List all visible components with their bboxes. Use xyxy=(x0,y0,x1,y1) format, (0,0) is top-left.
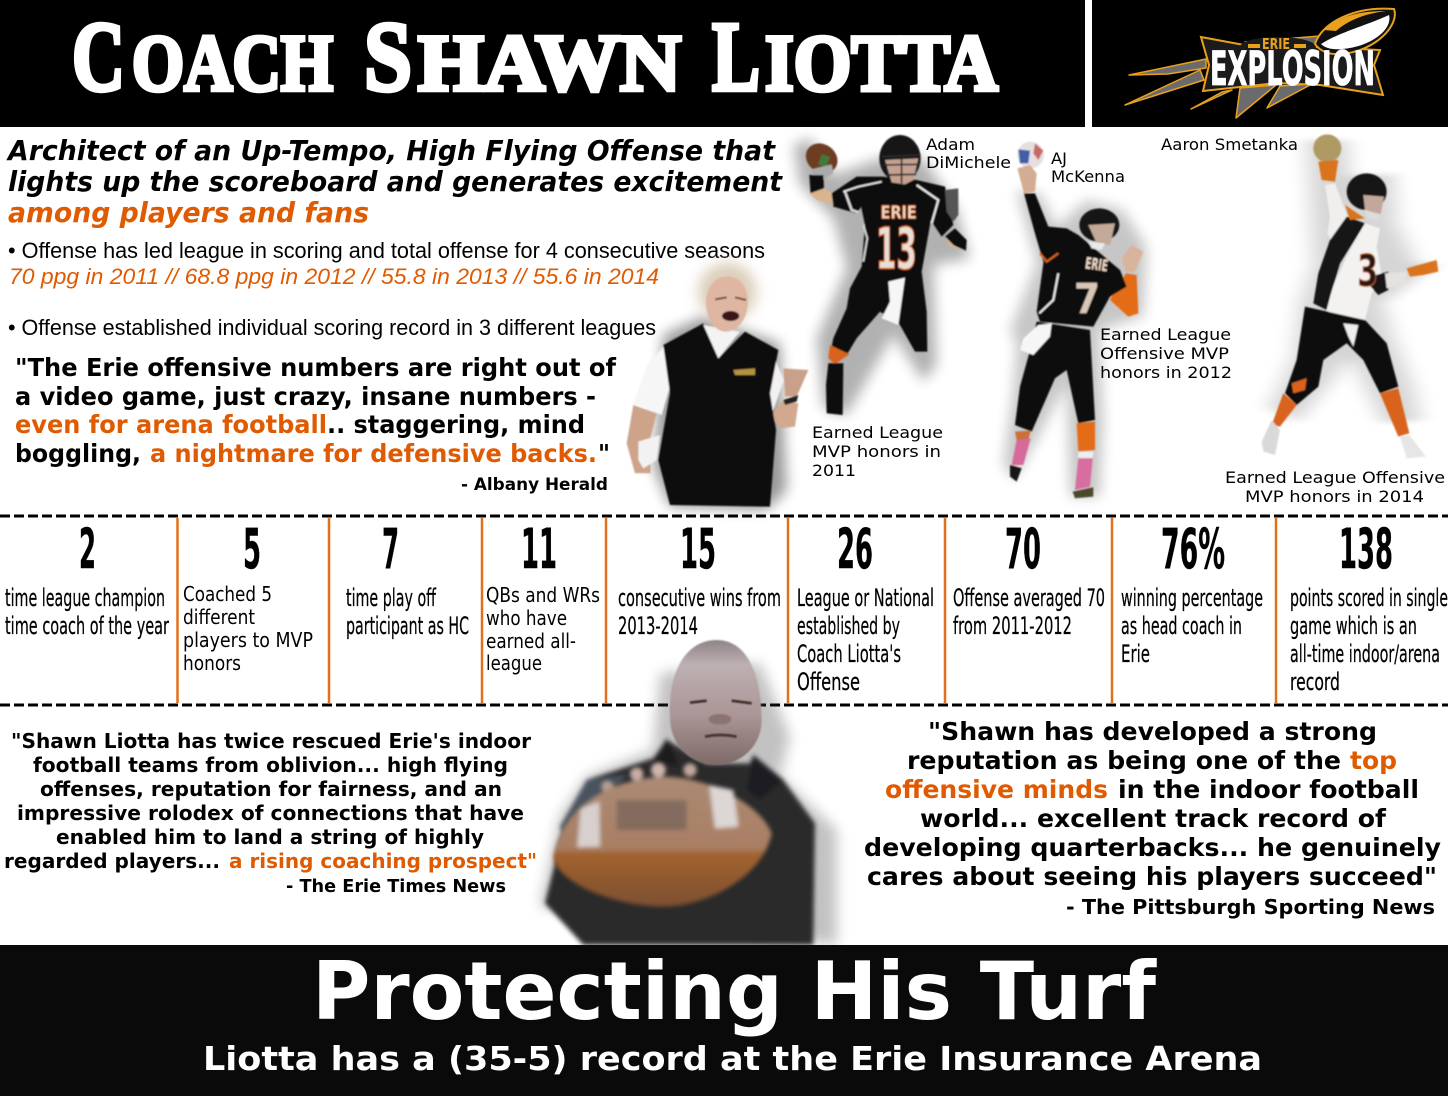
quote: Erie Times News: impressive rolodex of connections that have xyxy=(17,801,524,825)
quote: Pittsburgh Sporting News: reputation as being one of the xyxy=(907,746,1341,775)
title text: S xyxy=(364,1,412,112)
logo panel: Erie Explosion xyxy=(1092,0,1448,127)
quote: Erie Times News: "Shawn Liotta has twice rescued Erie's indoor xyxy=(11,729,531,753)
label: Aaron Smetanka: Aaron Smetanka xyxy=(1161,135,1298,154)
stat: 11: 11 xyxy=(521,517,557,581)
title text xyxy=(72,1,998,112)
stat: 76%: Erie xyxy=(1121,640,1150,668)
label: AJ McKenna: AJ xyxy=(1051,149,1067,168)
coach figure xyxy=(627,277,808,507)
stat: 138: record xyxy=(1290,668,1340,696)
quote: Erie Times News: - The Erie Times News xyxy=(286,876,506,897)
stat: 7: participant as HC xyxy=(346,612,469,640)
face features xyxy=(690,701,752,737)
stat: 2: 2 xyxy=(79,517,96,581)
quote: Albany Herald xyxy=(15,353,617,495)
stat: 26 xyxy=(797,517,934,696)
stat: 76% xyxy=(1121,517,1263,668)
title banner xyxy=(0,0,1085,127)
coach hair xyxy=(698,262,757,321)
quote: Albany Herald: even for arena football xyxy=(15,410,327,439)
stat: 7 xyxy=(346,517,469,640)
photo: Adam DiMichele 13 xyxy=(793,135,970,415)
heading: architect of an offense: among players and fans xyxy=(8,197,369,229)
quote: Pittsburgh Sporting News: world... excellent track record of xyxy=(920,804,1387,833)
stat: 11: QBs and WRs xyxy=(486,583,600,607)
stat: 138 xyxy=(1290,517,1448,696)
title text: HAWN xyxy=(418,20,681,108)
label: Adam DiMichele xyxy=(926,135,1011,172)
label: AJ McKenna xyxy=(1051,149,1125,186)
stat: 15: 15 xyxy=(680,517,716,581)
quote: Pittsburgh Sporting News xyxy=(864,717,1441,919)
jacket xyxy=(545,738,815,945)
logo wordmark xyxy=(1210,35,1375,97)
stat: 15 xyxy=(618,517,781,640)
stat: 5 xyxy=(183,517,313,675)
quote: Erie Times News: offenses, reputation for fairness, and an xyxy=(40,777,502,801)
stat: 70: from 2011-2012 xyxy=(953,612,1072,640)
stat: 26: 26 xyxy=(837,517,873,581)
footer heading: Protecting His Turf xyxy=(312,945,1157,1038)
jersey number: 3 xyxy=(1357,247,1378,297)
jersey lettering: ERIE xyxy=(1084,253,1109,275)
caption: MVP 2014 xyxy=(1225,468,1445,506)
stat: 7: time play off xyxy=(346,584,436,612)
title text: OACH xyxy=(132,20,333,108)
caption: MVP 2014: MVP honors in 2014 xyxy=(1245,487,1424,506)
coach shadow xyxy=(653,317,787,510)
quote: Pittsburgh Sporting News: cares about seeing his players succeed" xyxy=(867,862,1437,891)
heading: architect of an offense: Architect of an Up-Tempo, High Flying Offense that xyxy=(6,135,776,167)
stat: 76%: winning percentage xyxy=(1121,584,1263,612)
player figure xyxy=(800,135,967,415)
caption: MVP 2011: MVP honors in xyxy=(812,442,941,461)
bullet: scoring seasons xyxy=(8,238,765,289)
photo: coach on sideline xyxy=(627,262,808,510)
quote: Albany Herald: a nightmare for defensive backs. xyxy=(150,439,597,468)
caption: MVP 2012: Earned League xyxy=(1100,325,1231,344)
stat: 70: 70 xyxy=(1005,517,1041,581)
quote: Albany Herald: - Albany Herald xyxy=(461,475,608,495)
football xyxy=(553,763,772,907)
quote: Albany Herald: a video game, just crazy, insane numbers - xyxy=(15,382,596,411)
jersey lettering: 7 xyxy=(1074,274,1100,323)
caption: MVP 2012 xyxy=(1100,325,1232,382)
stat: 70 xyxy=(953,517,1105,640)
caption: MVP 2012: honors in 2012 xyxy=(1100,363,1232,382)
quote: Albany Herald: " xyxy=(598,439,610,468)
stat: 5: players to MVP xyxy=(183,628,313,652)
quote: Albany Herald: boggling, xyxy=(15,439,141,468)
player figure xyxy=(1010,142,1143,498)
stat: 5: 5 xyxy=(243,517,261,581)
title text: IOTTA xyxy=(765,20,998,108)
stat: 2: time league champion xyxy=(5,584,165,612)
quote: Pittsburgh Sporting News: developing quarterbacks... he genuinely xyxy=(864,833,1441,862)
stat: 5: Coached 5 xyxy=(183,582,272,606)
caption: MVP 2011: 2011 xyxy=(812,461,856,480)
quote: Erie Times News xyxy=(4,729,537,897)
stat: 5: honors xyxy=(183,651,241,675)
caption: MVP 2011 xyxy=(812,423,943,480)
stat: 70: Offense averaged 70 xyxy=(953,584,1105,612)
bullet: scoring record: • Offense established individual scoring record in 3 different leagues xyxy=(8,315,656,340)
photo: coach holding football xyxy=(540,640,837,945)
stat: 26: Coach Liotta's xyxy=(797,640,901,668)
quote: Erie Times News: a rising coaching prospect xyxy=(229,849,527,873)
stat: 15: consecutive wins from xyxy=(618,584,781,612)
logo football xyxy=(1315,9,1395,54)
photo: AJ McKenna 7 xyxy=(1003,142,1147,498)
caption: MVP 2011: Earned League xyxy=(812,423,943,442)
photo: Aaron Smetanka 3 xyxy=(1262,134,1438,458)
footer subheading: Liotta has a (35-5) record at the Erie Insurance Arena xyxy=(203,1039,1262,1078)
title text: L xyxy=(712,1,760,112)
jersey lettering xyxy=(876,202,917,282)
quote: Pittsburgh Sporting News: top xyxy=(1350,746,1397,775)
heading: architect of an offense xyxy=(6,135,783,229)
quote: Albany Herald: "The Erie offensive numbers are right out of xyxy=(15,353,617,382)
quote: Erie Times News: regarded players... xyxy=(4,849,220,873)
label: Adam DiMichele: Adam xyxy=(926,135,975,154)
stat: 11: league xyxy=(486,651,542,675)
player figure xyxy=(1262,134,1438,458)
heading: architect of an offense: lights up the scoreboard and generates excitement xyxy=(8,166,783,198)
stat: 11 xyxy=(486,517,600,675)
stat: 5: different xyxy=(183,605,255,629)
stat: 26: League or National xyxy=(797,584,934,612)
caption: MVP 2012: Offensive MVP xyxy=(1100,344,1229,363)
jersey lettering xyxy=(1074,253,1109,323)
quote: Albany Herald: .. staggering, mind xyxy=(327,410,585,439)
quote: Pittsburgh Sporting News: "Shawn has developed a strong xyxy=(928,717,1377,746)
bullet: scoring seasons: • Offense has led league in scoring and total offense for 4 consecutive seasons xyxy=(8,238,765,263)
label: Adam DiMichele: DiMichele xyxy=(926,153,1011,172)
stat: 11: earned all- xyxy=(486,629,576,653)
stat: 11: who have xyxy=(486,606,567,630)
player shadow xyxy=(793,138,970,415)
stat: 76%: as head coach in xyxy=(1121,612,1242,640)
quote: Erie Times News: " xyxy=(527,849,537,873)
quote: Erie Times News: enabled him to land a string of highly xyxy=(56,825,484,849)
stat: 2 xyxy=(5,517,169,640)
stat: 7: 7 xyxy=(382,517,399,581)
label: AJ McKenna: McKenna xyxy=(1051,167,1125,186)
quote: Pittsburgh Sporting News: - The Pittsburgh Sporting News xyxy=(1066,895,1435,919)
stat: 26: established by xyxy=(797,612,900,640)
logo wordmark: ERIE xyxy=(1262,35,1290,53)
photo shadow xyxy=(540,663,837,945)
stat: 26: Offense xyxy=(797,668,860,696)
title text: C xyxy=(72,1,125,112)
footer banner xyxy=(0,945,1448,1096)
bullet: scoring seasons: 70 ppg in 2011 // 68.8 ppg in 2012 // 55.8 in 2013 // 55.6 in 2014 xyxy=(9,264,659,289)
logo shield xyxy=(1201,37,1383,95)
quote: Erie Times News: football teams from oblivion... high flying xyxy=(33,753,508,777)
player shadow xyxy=(1270,140,1437,423)
stat: 15: 2013-2014 xyxy=(618,612,698,640)
player shadow xyxy=(1003,190,1147,497)
stat: 76%: 76% xyxy=(1161,517,1225,581)
logo spikes xyxy=(1125,36,1325,118)
quote: Pittsburgh Sporting News: in the indoor football xyxy=(1118,775,1419,804)
jersey lettering: ERIE xyxy=(881,202,917,223)
jersey lettering: 13 xyxy=(876,216,917,282)
head xyxy=(670,640,762,765)
quote: Pittsburgh Sporting News: offensive minds xyxy=(885,775,1108,804)
stat: 2: time coach of the year xyxy=(5,612,169,640)
caption: MVP 2014: Earned League Offensive xyxy=(1225,468,1445,487)
